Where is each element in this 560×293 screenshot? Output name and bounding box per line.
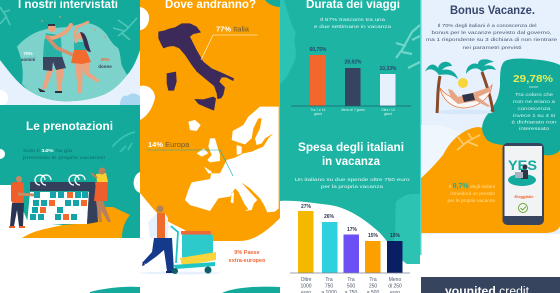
callout: teal blob: interessato bbox=[519, 126, 549, 132]
callout: Italy: 77% Italia bbox=[216, 24, 250, 34]
bar chart: trip duration: Oltre i 14 bbox=[381, 108, 395, 112]
label: women share bbox=[98, 57, 112, 69]
bar chart: trip duration: Tra 7 e 14 bbox=[311, 108, 326, 112]
icon: woman dancing bbox=[71, 22, 99, 93]
text block: loan bbox=[448, 183, 495, 204]
text block: loan: richiederà un prestito bbox=[450, 191, 495, 197]
label: men share: 70% bbox=[23, 51, 33, 56]
panel: interviewees bbox=[0, 0, 140, 106]
bar chart: spending: Oltre bbox=[301, 277, 312, 283]
icon: traveller with luggage trolley bbox=[140, 206, 220, 274]
callout: teal blob: è dichiarato non bbox=[512, 120, 557, 126]
text block bbox=[294, 177, 410, 190]
callout: Europe: 14% Europa bbox=[148, 140, 190, 149]
text block: Il 70% degli italiani è a conoscenza del bbox=[438, 23, 536, 29]
heading: Spesa degli italiani bbox=[298, 142, 404, 154]
text block: bonus per le vacanze previsto dal governo, bbox=[432, 30, 552, 36]
bar chart: spending: Tra bbox=[347, 277, 355, 283]
label: extra-European: extra-europeo bbox=[229, 258, 266, 264]
bar chart: spending: Meno bbox=[389, 277, 401, 283]
icon: man at calendar bbox=[9, 176, 34, 228]
label: women share: 30% bbox=[100, 57, 110, 62]
bar chart: trip duration bbox=[291, 47, 411, 116]
bar chart: spending: 15% bbox=[390, 233, 401, 239]
heading: in vacanza bbox=[322, 156, 381, 168]
panel: destinations bbox=[140, 0, 280, 293]
orange leaf bbox=[457, 133, 480, 150]
bar chart: spending: di 250 bbox=[388, 284, 402, 290]
bar chart: spending: Tra bbox=[369, 277, 377, 283]
callout: teal blob bbox=[482, 58, 560, 155]
text block: loan: per le proprie vacanze bbox=[448, 198, 495, 204]
leaf decoration bbox=[396, 25, 420, 68]
bar chart: spending: 750 bbox=[325, 284, 333, 290]
bar chart: spending: 27% bbox=[301, 204, 312, 210]
label: men share bbox=[21, 51, 35, 62]
icon: leaf bbox=[112, 132, 135, 152]
bar chart: spending: 250 bbox=[369, 284, 377, 290]
heading: Le prenotazioni bbox=[26, 121, 113, 133]
footer: logo bar bbox=[421, 277, 560, 293]
panel: trip length bbox=[280, 0, 420, 293]
text block: Un italiano su due spende oltre 750 euro bbox=[294, 177, 410, 183]
bar chart: spending bbox=[290, 204, 410, 293]
bar chart: trip duration: Meno di 7 giorni bbox=[341, 108, 365, 112]
icon: woman at calendar bbox=[91, 168, 111, 222]
panel: bookings bbox=[0, 105, 140, 293]
icon: blue leaf bbox=[120, 93, 140, 105]
text block: e due settimane in vacanza bbox=[314, 24, 391, 30]
icon: calendar bbox=[27, 175, 98, 224]
icon: phone with YES: YES bbox=[508, 157, 537, 173]
callout: teal blob: Tra coloro che bbox=[515, 92, 553, 98]
confetti bbox=[41, 16, 106, 38]
bar chart: spending: 15% bbox=[368, 233, 379, 239]
label: men share: uomini bbox=[21, 57, 35, 62]
icon: phone with YES bbox=[502, 143, 544, 225]
icon: hammock with palms bbox=[425, 59, 496, 114]
bar chart: trip duration: 28,92% bbox=[345, 60, 362, 66]
callout: teal blob: non ne erano a bbox=[513, 99, 555, 105]
bar chart: trip duration: giorni bbox=[384, 112, 392, 116]
text block: per la propria vacanza bbox=[321, 184, 383, 190]
bar chart: spending: 500 bbox=[347, 284, 355, 290]
text block: loan: Il 9,7% degli italiani bbox=[449, 183, 495, 190]
text block: Il 67% trascorre tra una bbox=[320, 17, 385, 23]
heading bbox=[298, 142, 404, 168]
bar chart: trip duration: 10,33% bbox=[380, 66, 397, 72]
bar chart: spending: Tra bbox=[325, 277, 333, 283]
callout: teal blob: invece 1 su 4 si bbox=[513, 113, 555, 119]
text block bbox=[314, 17, 391, 30]
heading: Bonus Vacanze. bbox=[450, 5, 535, 17]
text block: nei parametri previsti bbox=[462, 45, 522, 51]
callout: teal blob: 29,78% bbox=[513, 73, 554, 85]
bar chart: trip duration: 60,75% bbox=[310, 47, 327, 53]
text block: Solo il 14% ha già bbox=[23, 148, 72, 154]
text block: prenotato le proprie vacanze! bbox=[23, 155, 105, 161]
label: extra-European bbox=[229, 250, 266, 264]
callout: Italy bbox=[201, 24, 258, 60]
callout: teal blob: conoscenza bbox=[518, 107, 551, 112]
label: extra-European: 9% Paese bbox=[234, 250, 260, 256]
bar chart: spending: 26% bbox=[324, 214, 335, 220]
text block bbox=[426, 23, 557, 51]
callout: Europe bbox=[147, 140, 233, 176]
icon: man dancing bbox=[38, 24, 78, 93]
white curve background bbox=[280, 201, 420, 293]
text block: ma 1 rispondente su 3 dichiara di non rientrare bbox=[426, 37, 557, 43]
bar chart: spending: 17% bbox=[347, 227, 358, 233]
label: women share: donne bbox=[98, 64, 112, 69]
bar chart: spending: 1000 bbox=[300, 284, 312, 290]
panel: holiday bonus bbox=[420, 0, 560, 293]
decorative leaves bbox=[0, 7, 137, 40]
bar chart: trip duration: giorni bbox=[314, 112, 322, 116]
icon: phone with YES: Eleggibile bbox=[515, 194, 534, 199]
text block bbox=[23, 148, 105, 161]
map: Italy bbox=[158, 23, 234, 111]
map: Europe bbox=[185, 107, 279, 212]
